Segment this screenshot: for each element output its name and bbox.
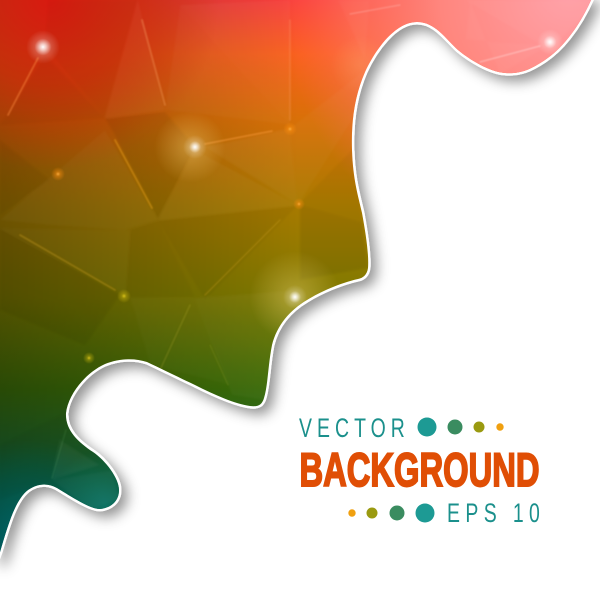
label: EPS 10: EPS 10	[447, 498, 540, 528]
text block: vector background eps 10	[299, 413, 540, 528]
sparkles	[160, 118, 219, 176]
top dots row	[418, 418, 504, 436]
bottom dots row	[348, 504, 434, 522]
light rays	[8, 5, 540, 478]
heading: VECTOR: VECTOR	[299, 413, 405, 443]
